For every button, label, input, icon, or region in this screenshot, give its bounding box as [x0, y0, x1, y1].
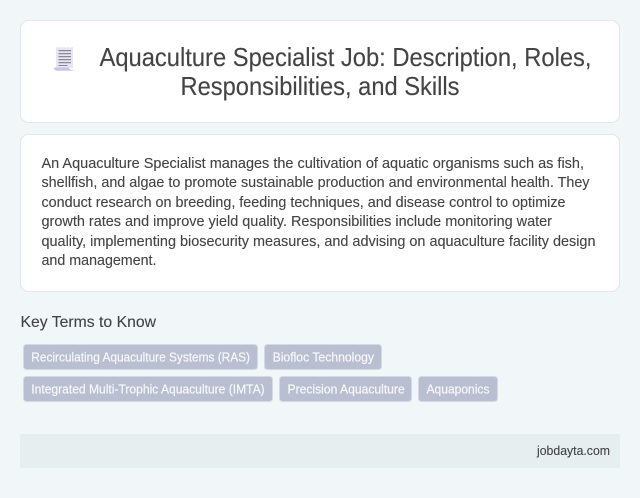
description text: and management. [42, 253, 156, 269]
panel: description card [20, 134, 620, 292]
title: Aquaculture Specialist Job: Description, Roles, [100, 44, 592, 72]
icon: document scroll [54, 47, 73, 71]
tag: aquaponics [418, 376, 498, 402]
title: Responsibilities, and Skills [180, 73, 460, 101]
description text: An Aquaculture Specialist manages the cultivation of aquatic organisms such as fish, [42, 156, 584, 172]
tag: biofloc [264, 344, 382, 370]
tag: precision: Precision Aquaculture [288, 381, 405, 396]
footer [20, 434, 620, 468]
tag: precision [280, 376, 412, 402]
description text: growth rates and improve yield quality. Responsibilities include monitoring water [42, 214, 552, 230]
tag: IMTA [24, 376, 272, 402]
description text: conduct research on breeding, feeding techniques, and disease control to optimize [42, 195, 566, 211]
title [100, 44, 592, 101]
tag: biofloc: Biofloc Technology [273, 349, 375, 364]
tag: RAS [24, 344, 258, 370]
footer: jobdayta.com [536, 443, 610, 458]
tag: aquaponics: Aquaponics [426, 381, 490, 396]
description text [42, 156, 596, 269]
description text: shellfish, and algae to promote sustainable production and environmental health. They [42, 175, 590, 191]
tag: RAS: Recirculating Aquaculture Systems (RAS) [31, 349, 250, 364]
heading: key terms: Key Terms to Know [20, 314, 156, 331]
description text: quality, implementing biosecurity measures, and advising on aquaculture facility design [42, 234, 596, 250]
panel: title card [20, 20, 620, 122]
tag: IMTA: Integrated Multi-Trophic Aquaculture (IMTA) [31, 381, 265, 396]
